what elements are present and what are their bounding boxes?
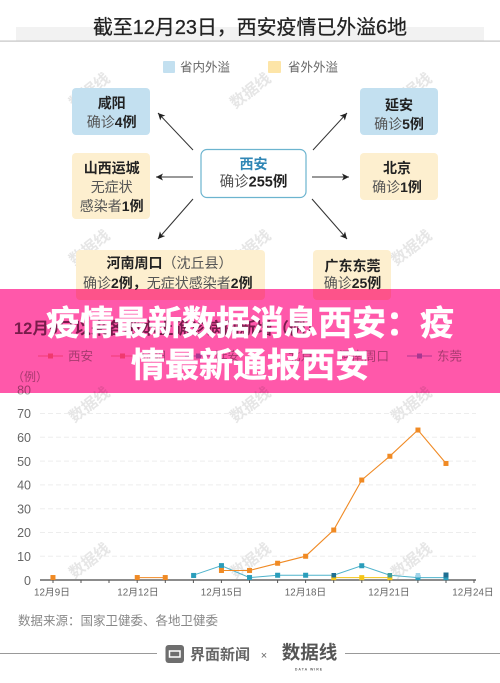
footer rule left — [0, 653, 157, 654]
node: 广东东莞 — [313, 250, 391, 300]
series: teal 延安/咸阳 — [191, 563, 448, 580]
legend: chart: 东莞 — [437, 350, 462, 364]
y axis labels: 50 — [17, 455, 31, 469]
logo: 界面新闻: 界面新闻 — [190, 646, 250, 664]
legend: map: 省外外溢 — [288, 60, 338, 74]
node: 河南周口: 河南周口（沈丘县） — [106, 255, 232, 271]
legend: chart: 北京 — [288, 350, 313, 364]
arrows — [156, 113, 349, 239]
node: 咸阳: 确诊4例 — [87, 114, 137, 130]
x axis labels: 12月24日 — [452, 586, 494, 598]
y axis labels: 10 — [17, 550, 31, 564]
banner headline line 2: 情最新通报西安 — [131, 347, 369, 385]
legend: chart: 延安 — [215, 348, 240, 364]
y axis labels: 30 — [17, 502, 31, 516]
watermarks: 数据线 — [226, 68, 275, 112]
watermarks: 数据线 — [65, 68, 114, 112]
node: 北京: 北京 — [383, 160, 411, 176]
logo: 数据线: 数据线 — [282, 642, 337, 663]
node: 西安: 确诊255例 — [220, 174, 287, 190]
node: 咸阳 — [72, 88, 150, 135]
legend: chart — [38, 348, 462, 364]
legend: chart: 咸阳 — [141, 350, 166, 364]
node: 山西运城: 山西运城 — [84, 160, 140, 176]
node: 咸阳: 咸阳 — [98, 95, 126, 111]
node: 山西运城: 无症状 — [91, 179, 133, 195]
y axis labels: 70 — [17, 407, 31, 421]
watermarks — [65, 68, 436, 582]
node: 广东东莞: 确诊25例 — [324, 275, 381, 291]
watermarks: 数据线 — [387, 68, 436, 112]
watermarks: 数据线 — [65, 382, 114, 426]
x axis — [40, 579, 476, 581]
watermarks: 数据线 — [226, 382, 275, 426]
legend: map — [163, 60, 338, 74]
x axis labels: 12月21日 — [368, 586, 410, 598]
y axis labels — [17, 384, 31, 588]
legend: chart: 西安 — [68, 348, 93, 364]
node: 北京: 确诊1例 — [372, 179, 422, 195]
source note: 数据来源：国家卫健委、各地卫健委 — [18, 613, 219, 628]
x axis labels: 12月15日 — [201, 586, 242, 598]
node: 河南周口 — [76, 250, 265, 300]
series: orange 西安 — [51, 428, 448, 580]
series: yellow 北京 — [332, 575, 392, 580]
node: 广东东莞: 广东东莞 — [324, 258, 380, 274]
node: 延安: 确诊5例 — [374, 116, 424, 132]
node: 山西运城 — [72, 153, 150, 219]
title band — [0, 27, 500, 42]
y axis labels: 20 — [17, 526, 31, 540]
legend: chart: 河南周口 — [339, 348, 389, 364]
logo: 界面新闻 — [166, 645, 250, 664]
chart title: 12月9日以来各地本土确诊病例新增（例） — [14, 318, 322, 338]
node: 延安 — [360, 88, 438, 135]
watermarks: 数据线 — [387, 382, 436, 426]
x axis labels: 12月18日 — [285, 586, 326, 598]
banner headline — [46, 305, 454, 385]
watermarks: 数据线 — [65, 225, 114, 269]
watermarks: 数据线 — [387, 538, 436, 582]
node: 北京 — [360, 153, 438, 200]
x axis labels — [34, 586, 494, 598]
y axis labels: 0 — [24, 574, 31, 588]
footer rule right — [345, 653, 500, 654]
multiply sign: × — [261, 650, 267, 662]
node: 延安: 延安 — [385, 97, 413, 113]
watermarks: 数据线 — [387, 225, 436, 269]
logo: 数据线: DATA WIRE — [295, 668, 323, 672]
node: 河南周口: 确诊2例，无症状感染者2例 — [83, 275, 253, 291]
title: 截至12月23日，西安疫情已外溢6地 — [93, 16, 407, 39]
y axis labels: 60 — [17, 431, 31, 445]
watermarks: 数据线 — [65, 538, 114, 582]
y axis unit: （例） — [12, 370, 48, 384]
node: 山西运城: 感染者1例 — [80, 198, 144, 214]
node: 西安 — [201, 150, 306, 198]
banner overlay — [0, 289, 500, 392]
legend: map: 省内外溢 — [180, 60, 230, 74]
watermarks: 数据线 — [226, 538, 275, 582]
series: dark blue and light blue points — [332, 572, 448, 578]
y axis labels: 40 — [17, 478, 31, 492]
banner headline line 1: 疫情最新数据消息西安：疫 — [46, 305, 454, 343]
y axis labels: 80 — [17, 384, 31, 398]
watermarks: 数据线 — [226, 225, 275, 269]
line chart — [12, 370, 494, 598]
node: 西安: 西安 — [240, 156, 268, 172]
x axis labels: 12月12日 — [117, 586, 159, 598]
x axis labels: 12月9日 — [34, 586, 70, 598]
